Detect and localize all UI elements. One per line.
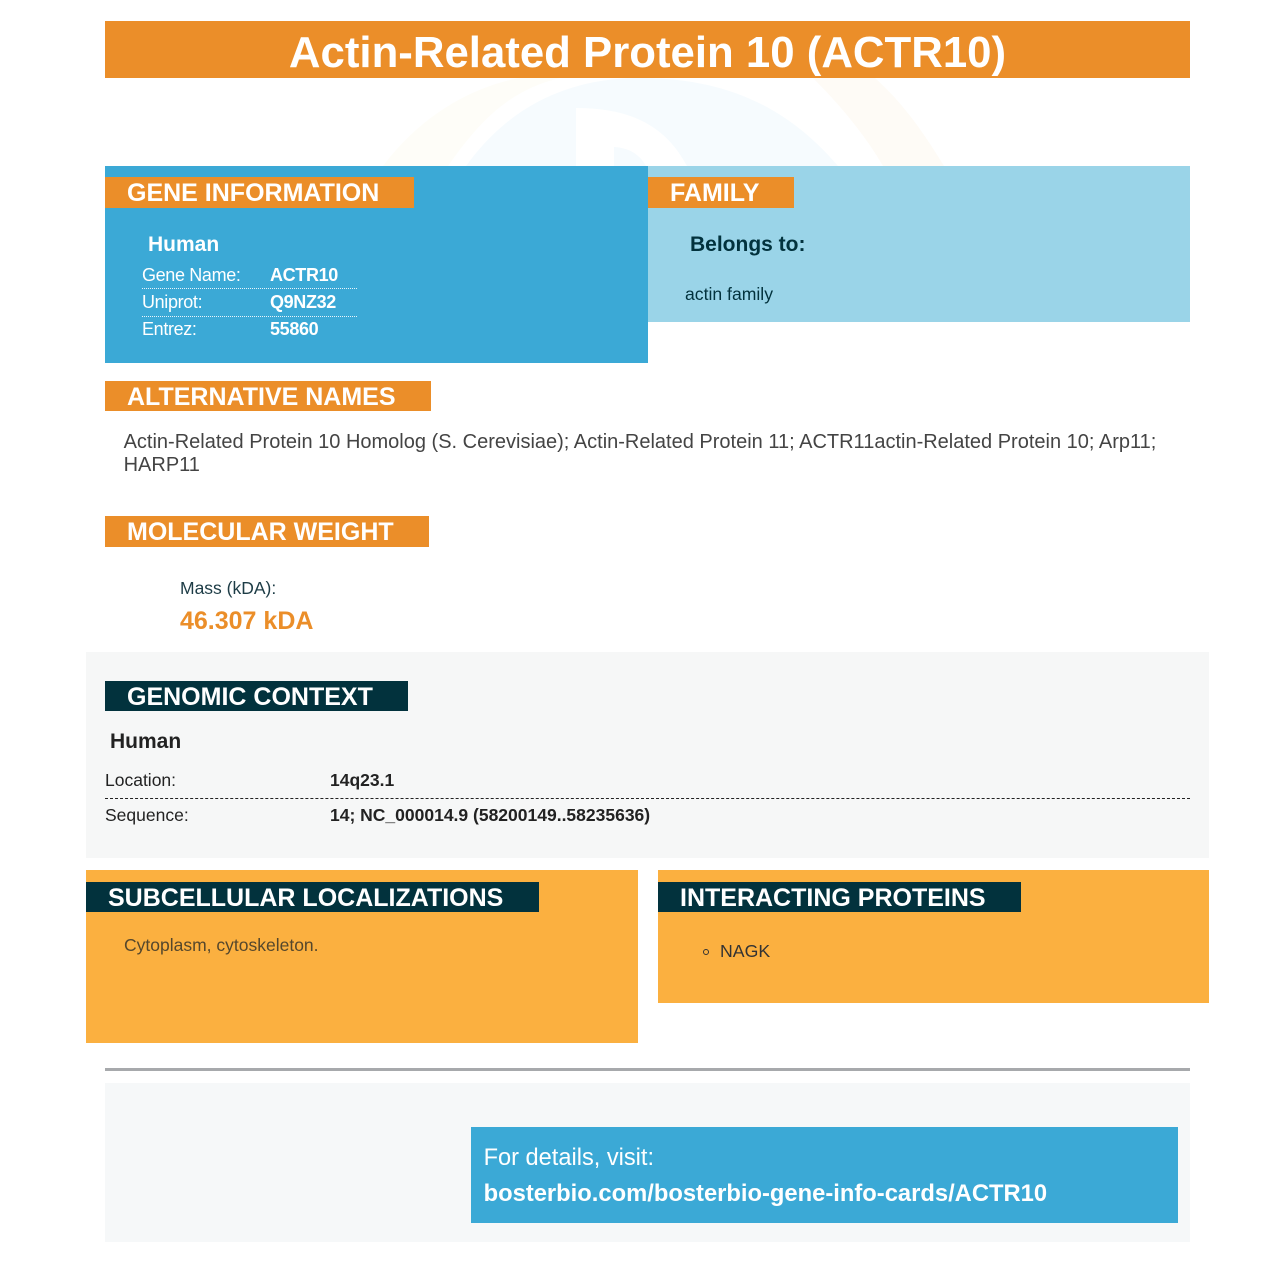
panel: genomic context	[86, 652, 1209, 858]
entrez row: 55860	[270, 319, 318, 339]
location row: Location:	[105, 770, 176, 790]
sequence row: Sequence:	[105, 805, 189, 825]
entrez row: Entrez:	[142, 319, 197, 339]
uniprot row: Q9NZ32	[270, 292, 336, 312]
location row	[105, 769, 1190, 799]
gene name row	[142, 264, 357, 289]
belongs to label: Belongs to:	[690, 233, 806, 256]
entrez row	[142, 319, 318, 339]
protein name: NAGK	[720, 941, 770, 961]
title banner	[105, 21, 1190, 78]
heading: family	[648, 177, 794, 208]
panel: family	[648, 166, 1190, 322]
alternative names text: Actin-Related Protein 10 Homolog (S. Cerevisiae); Actin-Related Protein 11; ACTR11actin-Related Protein 10; Arp11; HARP11	[124, 431, 1156, 476]
heading: alternative names: ALTERNATIVE NAMES	[127, 383, 396, 411]
gene name row: ACTR10	[270, 265, 338, 285]
title banner: Actin-Related Protein 10 (ACTR10)	[289, 28, 1006, 77]
uniprot row: Uniprot:	[142, 292, 202, 312]
footer rule	[105, 1068, 1190, 1071]
gene name row: Gene Name:	[142, 265, 241, 285]
heading: molecular weight: MOLECULAR WEIGHT	[127, 518, 394, 546]
location row: 14q23.1	[330, 770, 394, 790]
sequence row: 14; NC_000014.9 (58200149..58235636)	[330, 805, 650, 825]
heading: genomic context: GENOMIC CONTEXT	[127, 683, 373, 711]
heading: interacting proteins: INTERACTING PROTEINS	[680, 884, 986, 912]
mass label: Mass (kDA):	[180, 578, 276, 598]
panel: footer	[105, 1083, 1190, 1242]
url: bosterbio.com/bosterbio-gene-info-cards/ACTR10	[484, 1180, 1047, 1207]
uniprot row	[142, 291, 357, 317]
heading: gene information: GENE INFORMATION	[127, 179, 379, 207]
heading: family: FAMILY	[670, 179, 759, 207]
sequence row	[105, 805, 650, 825]
heading: subcellular localizations: SUBCELLULAR LOCALIZATIONS	[108, 884, 503, 912]
panel: interacting proteins	[658, 870, 1209, 1003]
mass value: 46.307 kDA	[180, 607, 313, 635]
list bullet	[703, 949, 709, 955]
callout: details link	[471, 1127, 1178, 1223]
species label: Human	[148, 233, 219, 256]
species label: Human	[110, 730, 181, 753]
panel: gene information	[105, 166, 648, 363]
panel: subcellular localizations	[86, 870, 638, 1043]
visit text: For details, visit:	[484, 1145, 654, 1171]
localization text: Cytoplasm, cytoskeleton.	[124, 935, 319, 955]
family text: actin family	[685, 284, 773, 304]
